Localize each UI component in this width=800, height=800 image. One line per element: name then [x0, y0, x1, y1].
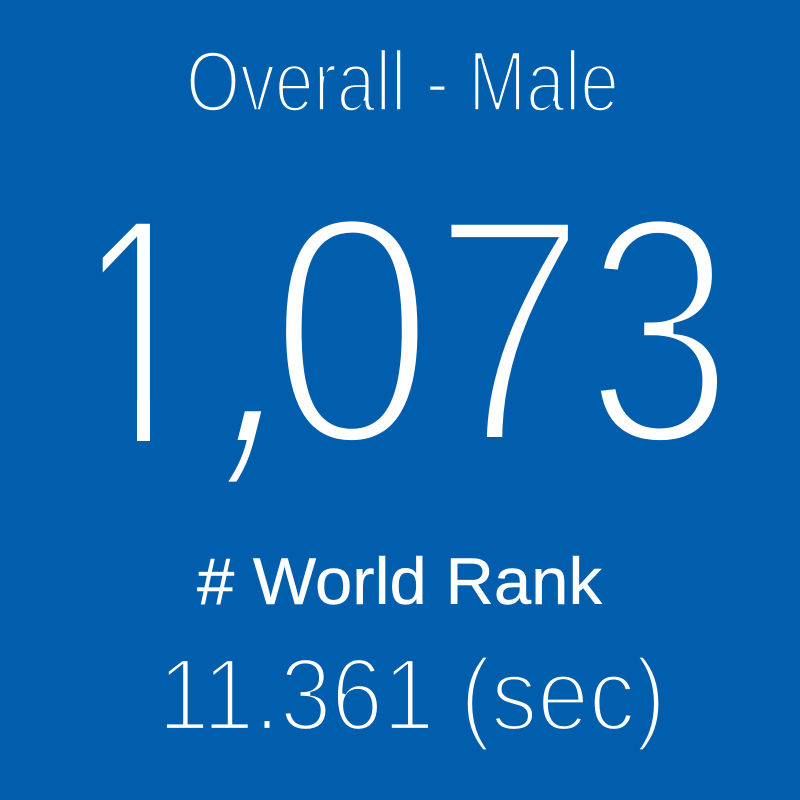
main number: 1 — [78, 149, 201, 513]
main number: 3 — [585, 149, 734, 513]
metric label: # World Rank — [197, 544, 603, 618]
time value: 11.361 (sec) — [158, 637, 666, 752]
title: Overall - Male — [186, 34, 619, 130]
main number: , — [198, 148, 348, 512]
main number: 7 — [432, 148, 587, 513]
main number: 0 — [269, 148, 435, 513]
main number — [78, 148, 734, 513]
